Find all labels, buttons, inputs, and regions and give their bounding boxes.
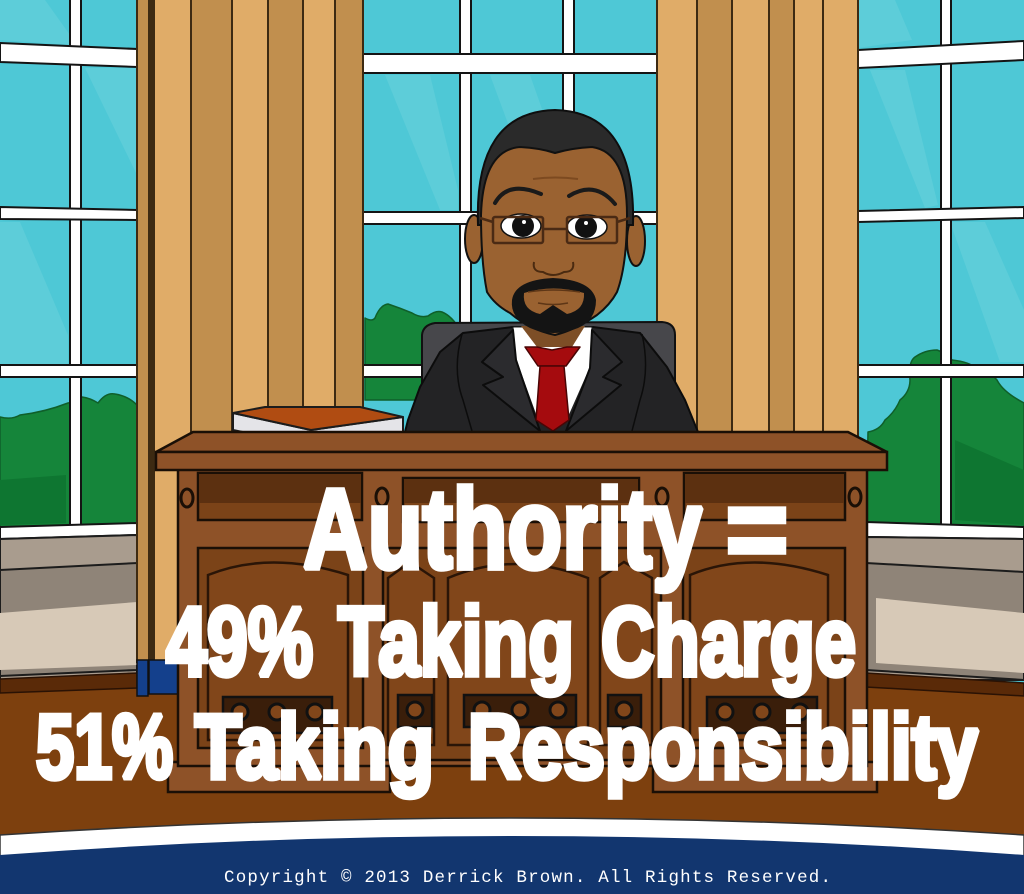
line 2: 49% Taking Charge: Taking [338, 587, 574, 696]
darker lower foliage [0, 440, 1024, 525]
trees outside windows [0, 304, 1024, 530]
book on desk [233, 407, 403, 446]
jacket seams [457, 334, 646, 431]
line 2: 49% Taking Charge: 49% [166, 587, 313, 696]
line 1: Authority =: Authority [303, 466, 702, 592]
cabinet doors [198, 548, 845, 760]
headline text [36, 466, 978, 798]
wall below windows [0, 535, 1024, 680]
office chair [422, 322, 675, 432]
window frames [0, 0, 1024, 539]
curtain tie: blue base [137, 660, 178, 696]
curtains [137, 0, 858, 662]
desk body [178, 468, 867, 766]
jacket lapels [482, 330, 622, 431]
desk handles [181, 488, 861, 507]
eyebrows [495, 189, 615, 204]
nose [534, 262, 573, 275]
drawers [198, 473, 845, 522]
suit jacket [405, 327, 698, 432]
copyright notice: Copyright © 2013 Derrick Brown. All Rights Reserved. [224, 868, 831, 888]
panel: sky background [0, 0, 1024, 700]
face [481, 147, 627, 335]
eyes [501, 214, 607, 239]
red necktie [525, 347, 580, 431]
mouth [528, 290, 580, 304]
ears [465, 215, 645, 266]
rug [0, 818, 1024, 894]
window light streaks [0, 0, 1024, 364]
desk top surface [156, 432, 887, 452]
shirt collar [513, 327, 592, 418]
neck [521, 326, 585, 347]
line 2: 49% Taking Charge: Charge [601, 587, 856, 696]
line 3: 51% Taking Responsibility: Taking [195, 697, 434, 798]
goatee beard [512, 278, 596, 333]
desk [156, 432, 887, 792]
drawer shading [199, 474, 844, 503]
hair [478, 110, 633, 225]
grille rings [232, 702, 808, 720]
glasses [480, 217, 630, 243]
desk top front edge [156, 452, 887, 470]
line 3: 51% Taking Responsibility: 51% [36, 697, 173, 798]
forehead crease [533, 178, 578, 179]
door grilles [223, 695, 817, 733]
arched door panels [208, 562, 828, 745]
floor [0, 673, 1024, 840]
line 1: Authority =: = [726, 466, 788, 592]
character: man in suit [405, 110, 698, 432]
desk feet [168, 762, 877, 792]
